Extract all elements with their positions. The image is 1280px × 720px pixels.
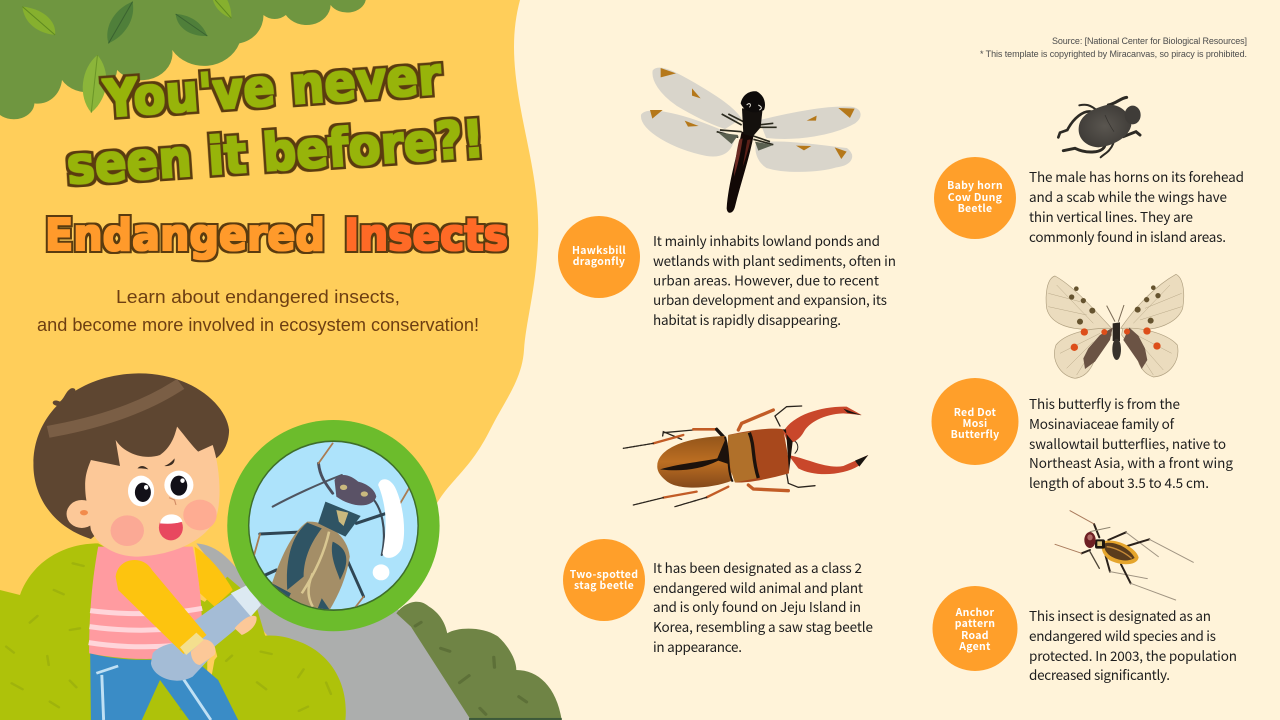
text: subtitle: Learn about endangered insects, bbox=[116, 287, 400, 307]
text: Hawksbill description: It mainly inhabits lowland ponds and bbox=[653, 230, 880, 250]
text: butterfly description: Mosinaviaceae family of bbox=[1029, 413, 1175, 433]
heading: Endangered Insects: Endangered bbox=[45, 210, 325, 261]
title: You've never seen it before bbox=[65, 47, 486, 197]
text: stag beetle description bbox=[653, 557, 873, 656]
illustration: anchor pattern insect bbox=[1055, 511, 1193, 600]
text: Hawksbill description: urban development and expansion, its bbox=[653, 289, 887, 309]
text: stag beetle description: in appearance. bbox=[653, 636, 742, 656]
text: subtitle: and become more involved in ecosystem conservation! bbox=[37, 315, 479, 335]
text: stag beetle description: endangered wild animal and plant bbox=[653, 577, 863, 597]
illustration: red dot butterfly bbox=[1046, 274, 1184, 378]
callout: Anchor pattern Road Agent: pattern bbox=[955, 616, 995, 631]
callout: Red Dot Mosi Butterfly bbox=[932, 378, 1018, 465]
boy shirt bbox=[89, 547, 202, 659]
callout: Hawksbill dragonfly: Hawksbill bbox=[572, 243, 626, 258]
callout: Red Dot Mosi Butterfly: Mosi bbox=[962, 416, 988, 431]
rock bbox=[196, 543, 473, 720]
text: dung beetle description: and a scab while the wings have bbox=[1029, 186, 1227, 206]
text: butterfly description bbox=[1029, 393, 1233, 492]
text: anchor insect description: protected. In 2003, the population bbox=[1029, 645, 1237, 665]
callout: Red Dot Mosi Butterfly: Butterfly bbox=[951, 427, 999, 442]
callout: Baby horn Cow Dung Beetle: Baby horn bbox=[947, 178, 1003, 193]
title: You've never seen it before: You've never bbox=[101, 47, 443, 130]
callout: Baby horn Cow Dung Beetle bbox=[934, 157, 1016, 239]
boy pants bbox=[90, 653, 238, 720]
magnifier lens with beetle bbox=[227, 420, 440, 631]
source note: * This template is copyrighted by Miracanvas, so piracy is prohibited. bbox=[980, 49, 1247, 59]
source note: Source: [National Center for Biological Resources] bbox=[1052, 36, 1247, 46]
boy head bbox=[67, 427, 220, 557]
text: anchor insect description: decreased significantly. bbox=[1029, 664, 1170, 684]
text: Hawksbill description bbox=[653, 230, 896, 329]
text: Hawksbill description: urban areas. However, due to recent bbox=[653, 270, 879, 290]
heading: Endangered Insects bbox=[45, 210, 508, 261]
callout: Hawksbill dragonfly: dragonfly bbox=[573, 254, 625, 269]
callout: Anchor pattern Road Agent: Agent bbox=[958, 639, 991, 654]
text: anchor insect description bbox=[1029, 605, 1237, 684]
boy front arm bbox=[116, 560, 215, 665]
illustration: tree canopy bbox=[0, 0, 366, 119]
title: You've never seen it before: seen it before?! bbox=[65, 109, 486, 197]
icon: leaf bbox=[176, 14, 207, 36]
text: dung beetle description: The male has horns on its forehead bbox=[1029, 166, 1244, 186]
text: subtitle bbox=[37, 287, 479, 335]
icon: leaf bbox=[213, 0, 231, 18]
text: butterfly description: This butterfly is from the bbox=[1029, 393, 1180, 413]
bush dashes bbox=[6, 563, 331, 711]
text: stag beetle description: It has been designated as a class 2 bbox=[653, 557, 862, 577]
callout: Two-spotted stag beetle: stag beetle bbox=[574, 578, 634, 593]
callout: Baby horn Cow Dung Beetle: Beetle bbox=[958, 201, 992, 216]
dark green bush bbox=[396, 602, 562, 720]
callout: Anchor pattern Road Agent: Road bbox=[961, 628, 989, 643]
heading: Endangered Insects: Insects bbox=[344, 210, 508, 261]
callout: Anchor pattern Road Agent: Anchor bbox=[955, 605, 994, 620]
text: anchor insect description: endangered wild species and is bbox=[1029, 625, 1216, 645]
icon: leaf bbox=[83, 55, 106, 113]
boy back arm bbox=[195, 547, 233, 607]
light green bushes bbox=[0, 543, 346, 720]
illustration: boy with magnifying glass in landscape bbox=[0, 373, 562, 720]
text: dung beetle description: thin vertical lines. They are bbox=[1029, 206, 1193, 226]
callout: Anchor pattern Road Agent bbox=[932, 586, 1018, 671]
text: dung beetle description: commonly found in island areas. bbox=[1029, 226, 1226, 246]
text: Hawksbill description: habitat is rapidly disappearing. bbox=[653, 309, 841, 329]
icon: leaf bbox=[22, 7, 55, 35]
panel: yellow wave bbox=[0, 0, 538, 720]
callout: Hawksbill dragonfly bbox=[558, 216, 640, 298]
callout: Two-spotted stag beetle: Two-spotted bbox=[570, 567, 638, 582]
illustration: two-spotted stag beetle bbox=[623, 406, 868, 507]
text: butterfly description: Northeast Asia, with a front wing bbox=[1029, 452, 1233, 472]
magnifier handle bbox=[151, 585, 261, 681]
text: butterfly description: swallowtail butterflies, native to bbox=[1029, 433, 1226, 453]
text: dung beetle description bbox=[1029, 166, 1244, 246]
text: stag beetle description: and is only found on Jeju Island in bbox=[653, 596, 861, 616]
boy hair bbox=[33, 373, 229, 539]
illustration: dung beetle bbox=[1058, 97, 1141, 157]
icon: leaf bbox=[107, 2, 133, 43]
callout: Two-spotted stag beetle bbox=[563, 539, 645, 621]
text: butterfly description: length of about 3.5 to 4.5 cm. bbox=[1029, 472, 1209, 492]
text: stag beetle description: Korea, resembling a saw stag beetle bbox=[653, 616, 873, 636]
text: anchor insect description: This insect is designated as an bbox=[1029, 605, 1211, 625]
callout: Red Dot Mosi Butterfly: Red Dot bbox=[954, 405, 997, 420]
illustration: hawksbill dragonfly bbox=[642, 68, 860, 213]
source note bbox=[980, 36, 1247, 59]
callout: Baby horn Cow Dung Beetle: Cow Dung bbox=[948, 190, 1003, 205]
text: Hawksbill description: wetlands with plant sediments, often in bbox=[653, 250, 896, 270]
